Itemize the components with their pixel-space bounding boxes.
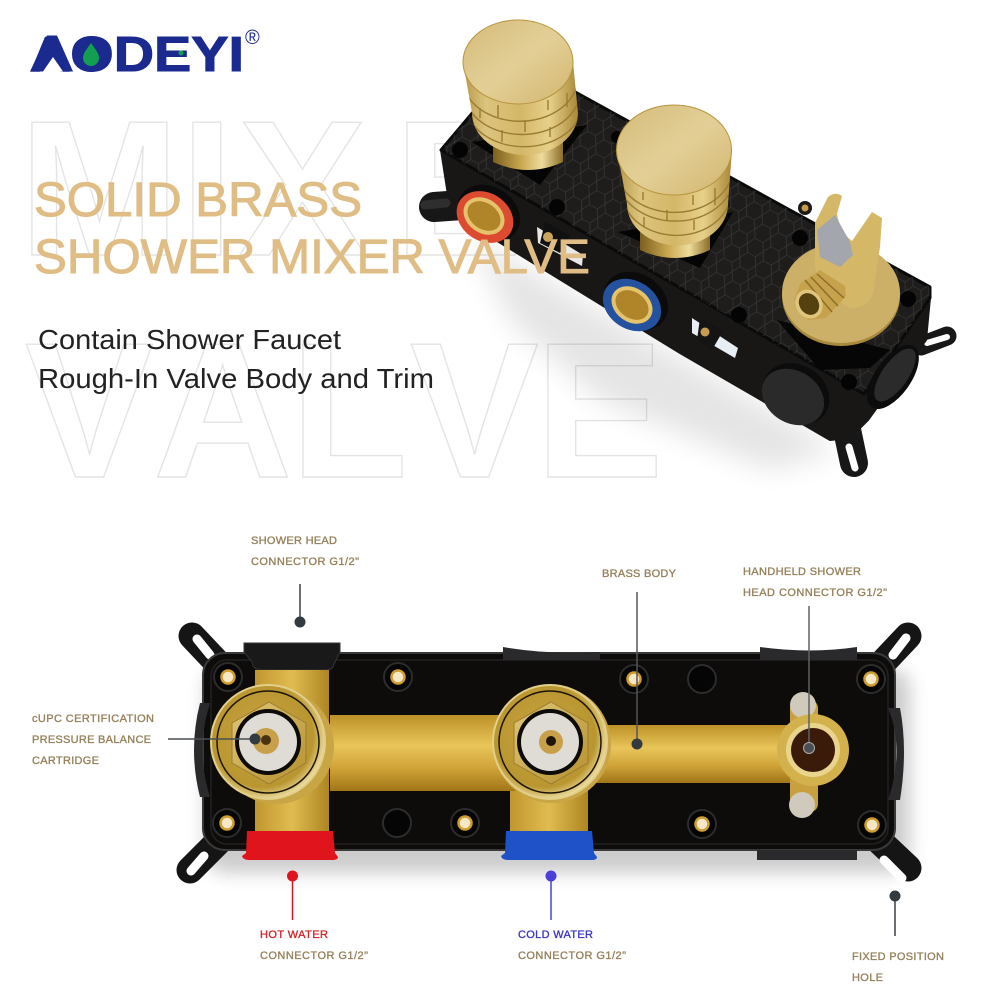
red cap: [242, 831, 338, 860]
callout: fixed position hole: FIXED POSITION: [852, 951, 944, 963]
logo: AODEYI: AODEYI: [30, 28, 244, 82]
holes on top face: [452, 131, 916, 390]
callout: shower head connector: SHOWER HEAD: [251, 535, 337, 547]
title: [34, 174, 590, 284]
callout: cold water: [518, 870, 626, 962]
left cartridge: [211, 685, 334, 804]
subtitle: [38, 324, 434, 394]
callout: handheld shower connector: [743, 566, 887, 754]
photo: upper mixer valve with trim: [425, 20, 947, 470]
centre brass knob: [616, 105, 733, 258]
callout: shower head connector: [251, 535, 359, 628]
handheld bracket: [782, 194, 900, 346]
callout: cartridge: CARTRIDGE: [32, 755, 99, 767]
subtitle: Rough-In Valve Body and Trim: [38, 363, 434, 394]
centre cartridge: [493, 685, 611, 803]
callout: cartridge: cUPC CERTIFICATION: [32, 713, 154, 725]
blue cap: [501, 831, 597, 860]
corner mounting tabs: [190, 636, 908, 878]
handheld outlet with screws: [777, 692, 849, 818]
callout: hot water: [260, 870, 368, 962]
bracket recess: [777, 320, 890, 370]
callout: cartridge: [32, 713, 260, 767]
photo shadow: [470, 235, 840, 470]
callout: fixed position hole: HOLE: [852, 972, 883, 984]
mounting tabs: [425, 203, 947, 468]
side face: [441, 150, 930, 440]
callout: brass body: BRASS BODY: [602, 568, 677, 580]
screw bosses: [213, 663, 886, 839]
shower head outlet cap: [244, 643, 340, 670]
callout: cold water: CONNECTOR G1/2": [518, 950, 626, 962]
subtitle: Contain Shower Faucet: [38, 324, 341, 355]
blue cold-water port: [593, 260, 679, 342]
knob recess shadows: [472, 125, 587, 185]
watermark: VALVE outline: VALVE: [25, 302, 664, 518]
black blanking plugs: [751, 336, 929, 437]
callout: brass body: [602, 568, 677, 750]
watermark: MIXE outline: MIXE: [19, 80, 523, 296]
callout: cold water: COLD WATER: [518, 929, 593, 941]
logo: AODEYI: ®: [245, 27, 260, 49]
callout: handheld shower connector: HEAD CONNECTOR G1/2": [743, 587, 887, 599]
title: SOLID BRASS: [34, 174, 362, 227]
callout: hot water: CONNECTOR G1/2": [260, 950, 368, 962]
front stickers and screws: [537, 201, 812, 358]
red hot-water port: [447, 173, 531, 253]
callout: shower head connector: CONNECTOR G1/2": [251, 556, 359, 568]
left brass knob: [462, 20, 582, 170]
black housing: [203, 653, 895, 850]
body shadow: [205, 668, 910, 873]
photo: rough-in valve body, front view: [190, 636, 910, 878]
callout: cartridge: PRESSURE BALANCE: [32, 734, 151, 746]
callout: hot water: HOT WATER: [260, 929, 328, 941]
housing inner rim: [211, 660, 888, 844]
title: SHOWER MIXER VALVE: [34, 231, 590, 284]
brass vertical and horizontal bodies: [255, 670, 800, 835]
callout: fixed position hole: [852, 890, 944, 984]
top face with honeycomb: [441, 60, 930, 394]
housing edge notches: [194, 647, 904, 860]
callout: handheld shower connector: HANDHELD SHOWER: [743, 566, 861, 578]
